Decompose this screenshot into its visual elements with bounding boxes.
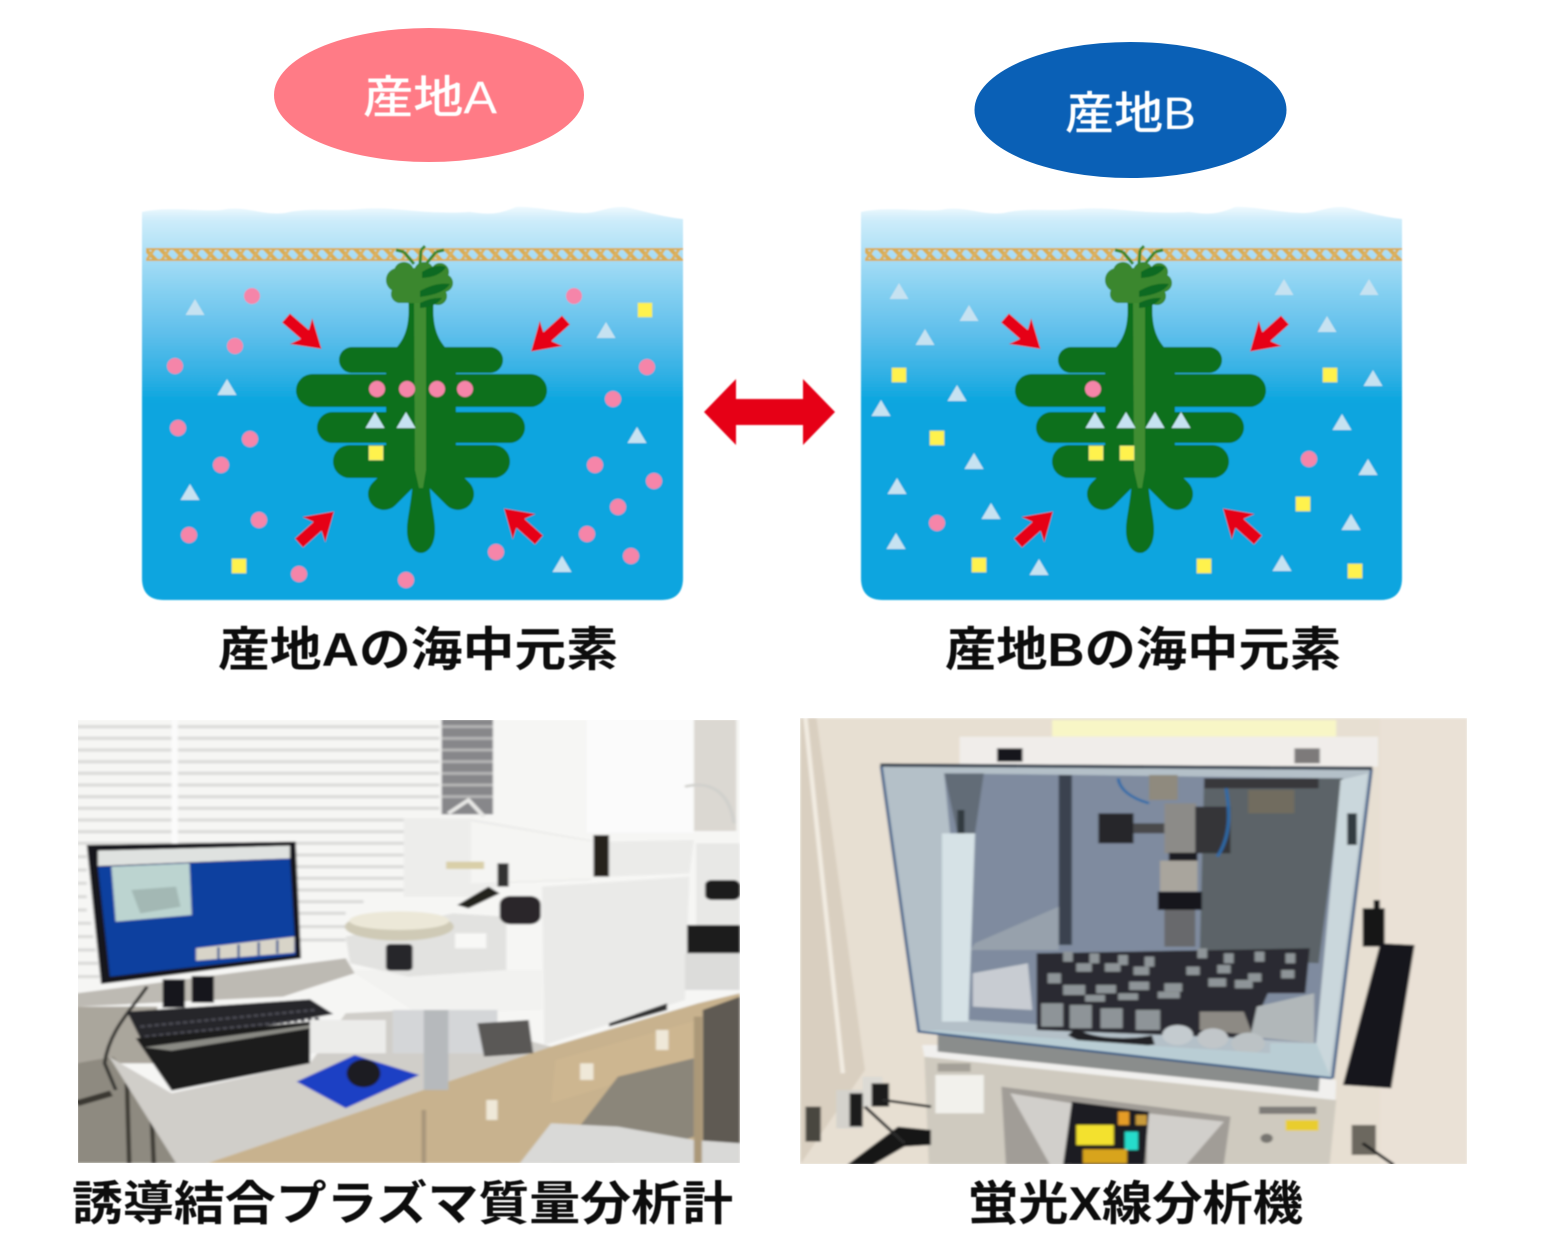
mouse pad bbox=[297, 1055, 419, 1108]
black side device bbox=[1363, 908, 1385, 947]
photo: X-ray fluorescence analyzer bbox=[800, 718, 1467, 1165]
caption: 蛍光X線分析機: 蛍光X線分析機 bbox=[968, 1177, 1303, 1230]
badge: 産地B bbox=[974, 42, 1286, 178]
lower body bbox=[924, 1057, 1336, 1165]
badge: 産地A: 産地A bbox=[363, 72, 497, 123]
cabinet head bbox=[960, 737, 1378, 767]
caption: 誘導結合プラズマ質量分析計: 誘導結合プラズマ質量分析計 bbox=[72, 1177, 733, 1230]
badge: 産地B: 産地B bbox=[1065, 88, 1196, 139]
lower left bbox=[78, 1056, 178, 1163]
desktop PC bbox=[136, 1022, 310, 1091]
sample tray bbox=[1037, 948, 1310, 1038]
uptake arrows B bbox=[994, 305, 1296, 556]
badge: 産地A bbox=[274, 28, 584, 162]
column below stage bbox=[393, 1010, 497, 1053]
window frame bbox=[880, 765, 1372, 1078]
measuring head bbox=[1149, 775, 1178, 800]
front panel bbox=[935, 1075, 984, 1113]
element particles A bbox=[167, 288, 662, 588]
seaweed B bbox=[1015, 246, 1266, 553]
caption: 産地Bの海中元素: 産地Bの海中元素 bbox=[945, 623, 1341, 676]
panel: 産地B sea illustration bbox=[861, 207, 1402, 600]
table top bbox=[109, 1010, 551, 1163]
stage bbox=[355, 970, 542, 1013]
arrow: double-headed comparison bbox=[704, 379, 835, 445]
adjacent microscope bbox=[696, 843, 740, 927]
instrument main body bbox=[542, 877, 689, 1045]
cabinet wood bbox=[207, 993, 740, 1163]
keyboard bbox=[126, 998, 334, 1040]
photo: inductively coupled plasma mass spectrometer bbox=[77, 719, 740, 1163]
element particles B bbox=[872, 279, 1382, 578]
monitor bbox=[87, 842, 301, 984]
caption: 産地Aの海中元素: 産地Aの海中元素 bbox=[218, 623, 618, 676]
uptake arrows A bbox=[275, 305, 577, 556]
wall outlets and cables bbox=[805, 1107, 821, 1142]
seaweed A bbox=[296, 246, 547, 553]
blinds column bbox=[442, 719, 493, 814]
sill bbox=[77, 958, 355, 1007]
panel: 産地A sea illustration bbox=[142, 207, 683, 600]
